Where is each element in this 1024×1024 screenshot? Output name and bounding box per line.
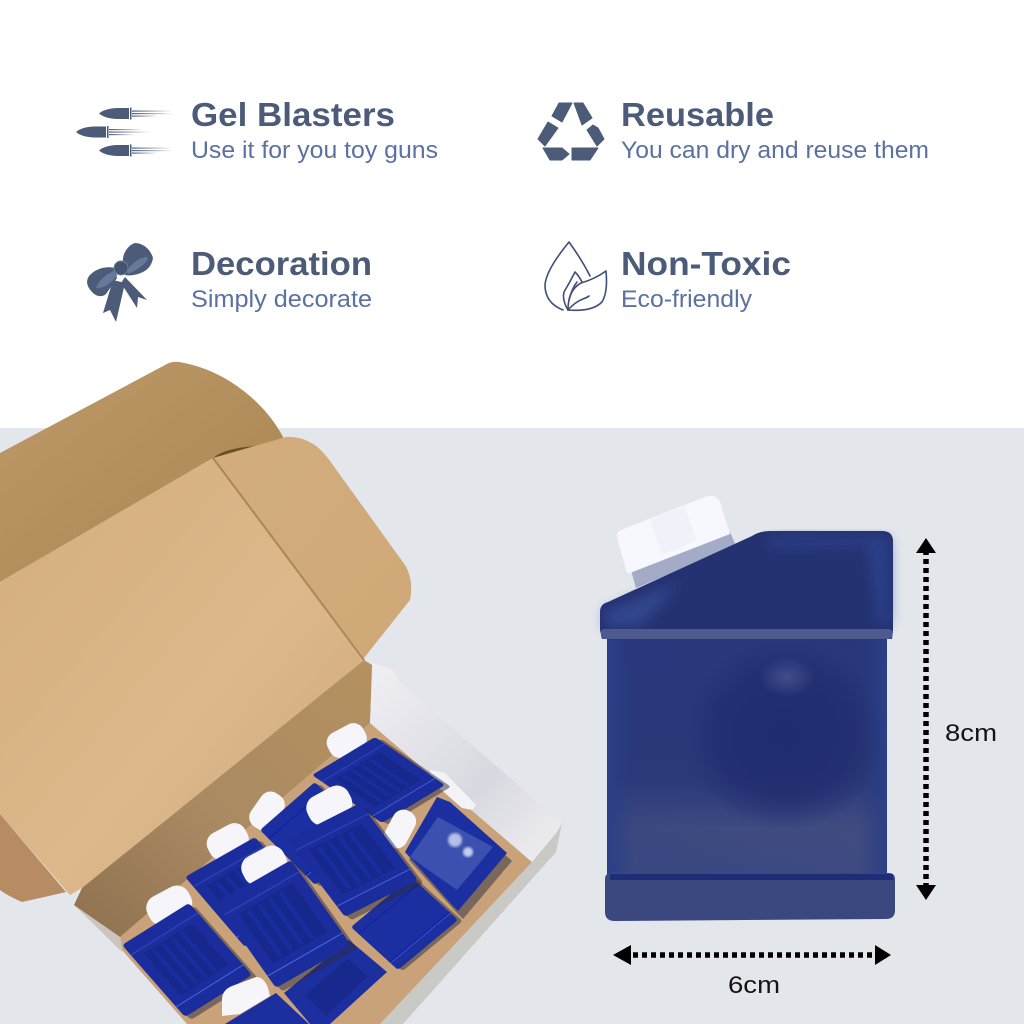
icon: recycle symbol bbox=[538, 103, 604, 160]
icon: ribbon bow bbox=[87, 243, 153, 322]
box: inner back wall bbox=[74, 660, 372, 937]
bottle neck bbox=[631, 532, 736, 588]
small bottle: bottom edge bbox=[222, 977, 309, 1024]
small bottle: second row left bbox=[185, 819, 321, 951]
base dark line bbox=[610, 874, 893, 880]
small bottle: top right bbox=[312, 719, 451, 826]
text: gel blasters description: Use it for you toy guns bbox=[191, 137, 438, 164]
text: non-toxic description: Eco-friendly bbox=[621, 286, 752, 313]
lower grey background panel bbox=[0, 428, 1024, 1024]
width dimension arrow bbox=[613, 945, 891, 965]
body edge highlights bbox=[607, 640, 887, 875]
box: main lid bbox=[0, 458, 364, 895]
large blue bottle bbox=[600, 496, 895, 921]
box: white side wall bbox=[370, 663, 562, 862]
text: reusable description: You can dry and reuse them bbox=[621, 137, 929, 164]
heading: Decoration: Decoration bbox=[191, 245, 372, 282]
open cardboard box with bottles bbox=[0, 362, 562, 1024]
height dimension arrow bbox=[916, 538, 936, 900]
small bottle: behind centre bbox=[245, 781, 375, 888]
icon: three flying bullets bbox=[76, 108, 173, 156]
bottle cap bbox=[617, 496, 730, 573]
text: decoration description: Simply decorate bbox=[191, 286, 372, 313]
bottle main body bbox=[607, 632, 887, 877]
label: 6cm: 6cm bbox=[728, 972, 780, 999]
label: 8cm: 8cm bbox=[945, 720, 997, 747]
small bottle: bottom left bbox=[122, 881, 258, 1021]
feature: Decoration bbox=[87, 243, 372, 322]
box: left side edge bbox=[74, 905, 122, 952]
heading: Gel Blasters: Gel Blasters bbox=[191, 96, 395, 133]
feature: Non-Toxic bbox=[545, 242, 791, 313]
heading: Non-Toxic: Non-Toxic bbox=[621, 245, 791, 282]
box: floor tab bbox=[430, 770, 476, 810]
box: back flap bbox=[0, 362, 283, 582]
bottle shoulder bbox=[600, 531, 893, 639]
small bottle: centre front bbox=[287, 781, 424, 922]
box: outer grey side bbox=[380, 823, 562, 1024]
small bottle: flat base view bbox=[351, 876, 463, 973]
body dark core bbox=[685, 640, 885, 830]
bottle base bbox=[605, 873, 895, 921]
body soft glow bbox=[759, 657, 815, 697]
box: lid fold lines bbox=[213, 458, 364, 660]
icon: water drop with leaves bbox=[545, 242, 606, 310]
small bottle: bottom centre bbox=[284, 940, 387, 1024]
heading: Reusable: Reusable bbox=[621, 96, 774, 133]
small bottle: shiny right bbox=[380, 797, 512, 919]
box: lower left flap bbox=[0, 814, 66, 902]
shoulder band bbox=[601, 629, 892, 639]
feature: Reusable bbox=[538, 96, 929, 164]
box: flap fold slit bbox=[213, 438, 287, 458]
small bottle: large front bbox=[216, 841, 357, 993]
feature: Gel Blasters bbox=[76, 96, 438, 164]
box: cardboard floor bbox=[120, 723, 532, 1024]
box: right side flap bbox=[213, 437, 411, 658]
shoulder lit edges bbox=[606, 538, 888, 626]
